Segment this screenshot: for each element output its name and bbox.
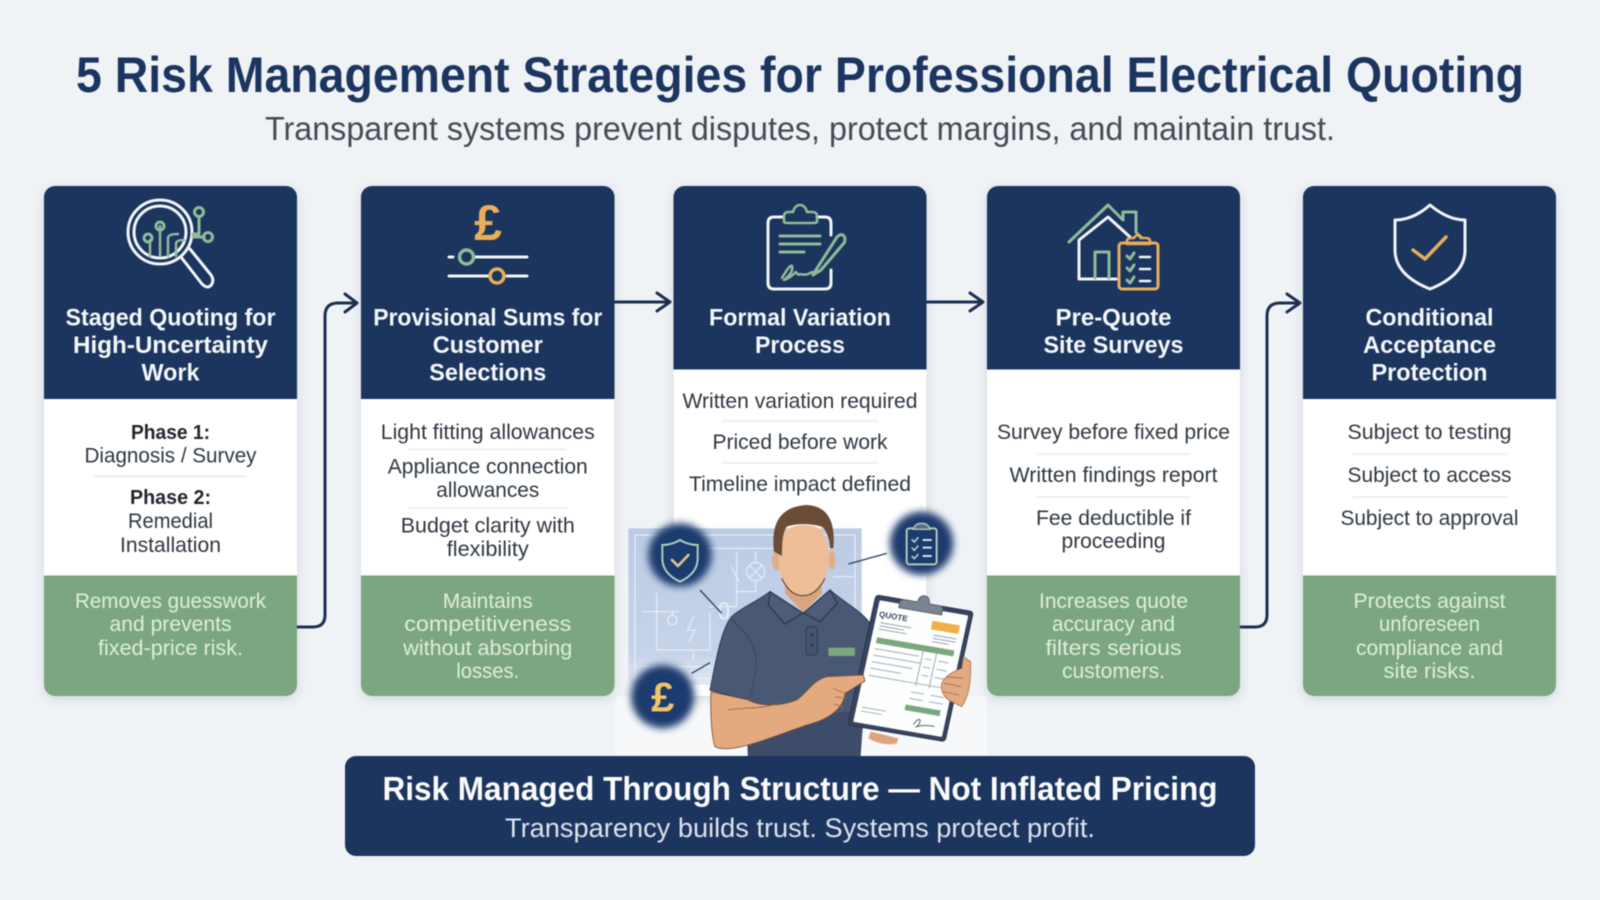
card 4 body: Written findings report [1010,464,1218,487]
card 5 heading [1363,304,1496,386]
card 2 heading: Selections [429,360,546,386]
card 5 heading: Acceptance [1363,332,1496,359]
subtitle: Transparent systems prevent disputes, protect margins, and maintain trust. [265,110,1335,147]
electrician [710,505,870,757]
title: 5 Risk Management Strategies for Professional Electrical Quoting [76,47,1524,103]
card 5 body: Subject to testing [1348,421,1512,444]
bottom banner [345,756,1255,856]
card 1 benefit: fixed-price risk. [98,637,243,660]
card 2 benefit: losses. [456,660,519,683]
card 5 header [1303,186,1556,399]
card 1 heading: Work [142,360,200,386]
panel: formal variation [674,186,926,696]
icon: magnifier with circuit [128,200,213,287]
card 5 heading: Conditional [1366,304,1494,332]
card 1 body: Installation [120,534,221,557]
central illustration [628,505,975,757]
blueprint [628,528,887,685]
card 3 body: Written variation required [682,390,918,413]
card 2 header [361,186,614,399]
icon: checklist badge [890,512,953,575]
card 3 body: Timeline impact defined [689,473,911,496]
card 5 body [1340,421,1518,530]
card 1 heading: Staged Quoting for [66,304,276,332]
card 2 benefit: competitiveness [404,613,571,636]
icon: pound badge [631,665,694,728]
card 4 body [997,421,1230,553]
card 4 benefit [987,576,1240,696]
card 2 benefit: without absorbing [402,637,572,660]
icon: shield with check [1395,205,1465,289]
card 3 header [674,186,926,370]
card 3 heading [709,304,891,359]
card 2 heading: Provisional Sums for [373,304,602,332]
card 4 benefit: accuracy and [1052,613,1175,636]
icon: pound and sliders: £ [474,195,502,251]
card 5 benefit: Protects against [1354,590,1506,613]
card 4 heading: Pre-Quote [1056,304,1172,332]
panel: staged quoting [44,186,297,696]
hands [711,657,971,749]
card 4 heading: Site Surveys [1044,332,1184,359]
card 3 body [682,390,918,496]
bottom banner: Risk Managed Through Structure — Not Inflated Pricing [382,770,1218,807]
card 4 benefit: filters serious [1046,637,1182,660]
arrow: card 4 to card 5 [1240,294,1300,627]
card 5 benefit: unforeseen [1379,613,1480,636]
icon: signed clipboard [768,205,845,289]
card 1 body: Phase 2: [130,487,211,509]
card 3 body: Priced before work [712,431,888,454]
card 4 benefit: customers. [1062,660,1165,683]
card 3 heading: Formal Variation [709,304,891,332]
card 1 benefit: Removes guesswork [75,590,266,613]
arrow: card 2 to card 3 [614,293,670,311]
card 1 benefit: and prevents [110,613,232,636]
icon: pound badge: £ [651,674,674,721]
panel: provisional sums [361,186,614,696]
card 5 benefit: site risks. [1384,660,1476,683]
card 2 heading [373,304,602,386]
card 2 heading: Customer [433,332,543,359]
card 5 benefit: compliance and [1356,637,1503,660]
card 4 body: proceeding [1062,530,1166,553]
card 2 body: Light fitting allowances [381,421,595,444]
card 1 body: Remedial [128,510,213,533]
card 2 body: Budget clarity with [401,514,575,538]
card 4 body: Survey before fixed price [997,421,1230,444]
card 1 heading [66,304,276,386]
card 1 heading: High-Uncertainty [73,332,269,359]
card 5 heading: Protection [1372,360,1488,386]
card 2 body: flexibility [447,538,529,561]
card 3 heading: Process [755,332,845,359]
card 5 benefit [1303,576,1556,696]
card 4 heading [1044,304,1184,359]
card 4 benefit: Increases quote [1039,590,1188,613]
backdrop behind illustration [615,696,987,756]
card 5 body: Subject to approval [1340,507,1518,530]
card 1 header [44,186,297,399]
icon: shield badge [648,523,712,587]
clipboard with quote [848,588,975,742]
icon: pound and sliders [449,195,527,283]
card 2 body [381,421,595,561]
arrow: card 1 to card 2 [297,294,357,627]
panel: conditional acceptance [1303,186,1556,696]
card 2 benefit [361,576,614,696]
card 4 body: Fee deductible if [1036,507,1191,530]
icon: house and checklist [1069,205,1158,289]
card 1 body [84,422,257,557]
card 2 body: allowances [436,479,539,502]
bottom banner: Transparency builds trust. Systems protect profit. [505,813,1095,843]
clipboard with quote: QUOTE [878,610,909,624]
arrow: card 3 to card 4 [926,293,983,311]
card 2 body: Appliance connection [388,456,588,478]
card 1 body: Phase 1: [131,422,210,444]
card 1 benefit [44,576,297,696]
panel: pre-quote surveys [987,186,1240,696]
card 1 body: Diagnosis / Survey [84,444,257,468]
card 5 body: Subject to access [1348,464,1512,487]
card 4 header [987,186,1240,370]
card 2 benefit: Maintains [443,590,533,613]
